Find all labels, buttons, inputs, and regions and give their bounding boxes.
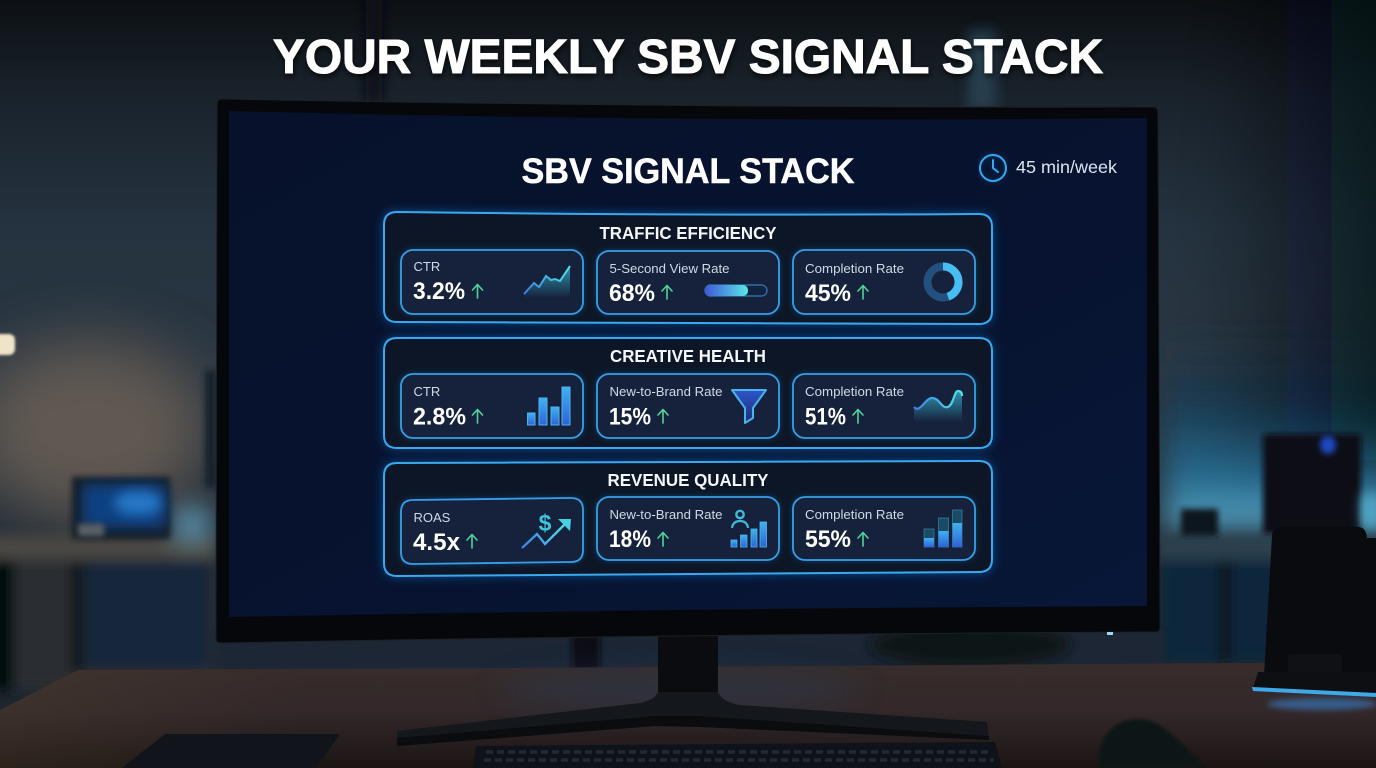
icon: dollar growth arrow <box>522 510 571 548</box>
icon: funnel <box>732 390 766 423</box>
icon: sparkline <box>524 266 570 298</box>
card: completion rate: Completion Rate <box>805 261 904 276</box>
card: CTR: 2.8% <box>413 404 466 430</box>
monitor frame <box>216 99 1160 643</box>
left background desk and legs <box>0 535 216 690</box>
background tower with blue light <box>1263 434 1376 534</box>
panel frame <box>384 338 992 448</box>
panel frame <box>384 212 992 324</box>
card: completion rate: 55% <box>805 526 851 553</box>
background laptop <box>72 477 212 543</box>
panel: traffic efficiency <box>384 212 992 324</box>
icon: clock <box>980 155 1006 181</box>
time badge <box>980 155 1117 181</box>
heading: CREATIVE HEALTH <box>610 346 766 366</box>
card: completion rate: 51% <box>805 404 846 430</box>
right background desk <box>1158 536 1376 665</box>
icon: customer bars <box>731 511 766 547</box>
card: completion rate: Completion Rate <box>805 384 904 399</box>
card: completion rate <box>793 374 975 438</box>
monitor stand <box>397 630 989 746</box>
card: new-to-brand rate: New-to-Brand Rate <box>610 507 722 522</box>
card: new-to-brand rate: 18% <box>609 526 651 553</box>
card: ROAS: 4.5x <box>413 529 461 556</box>
icon: progress bar <box>705 285 767 296</box>
card: completion rate <box>793 250 975 314</box>
time label: 45 min/week <box>1016 157 1117 177</box>
dashboard heading: SBV SIGNAL STACK <box>522 151 855 191</box>
card: ROAS <box>401 498 583 564</box>
icon: wave chart <box>914 391 962 422</box>
small background box <box>1181 509 1218 536</box>
icon: dollar growth arrow: $ <box>539 510 552 536</box>
card: CTR: 3.2% <box>413 278 465 305</box>
icon: bar chart <box>528 387 570 425</box>
wall lamp <box>0 334 15 355</box>
card: new-to-brand rate: New-to-Brand Rate <box>610 384 722 399</box>
icon: stacked bars <box>924 510 962 547</box>
heading: REVENUE QUALITY <box>608 470 769 490</box>
card: CTR: CTR <box>414 259 440 274</box>
card: completion rate <box>793 497 975 560</box>
mouse <box>1099 719 1205 768</box>
panel: creative health <box>384 338 992 448</box>
phone stand <box>1252 527 1376 710</box>
card: 5-second view rate <box>597 251 779 314</box>
card: CTR <box>401 374 583 438</box>
left background shelf <box>205 370 217 488</box>
panel: revenue quality <box>384 461 992 576</box>
card: CTR: CTR <box>414 384 440 399</box>
card: new-to-brand rate: 15% <box>609 404 651 430</box>
keyboard <box>473 742 1002 768</box>
card: 5-second view rate: 68% <box>609 280 655 307</box>
panel frame <box>384 461 992 576</box>
card: completion rate: 45% <box>805 280 851 307</box>
heading: TRAFFIC EFFICIENCY <box>600 223 777 243</box>
card: 5-second view rate: 5-Second View Rate <box>610 261 730 276</box>
monitor screen <box>229 111 1147 617</box>
card: CTR <box>401 250 583 314</box>
main title: YOUR WEEKLY SBV SIGNAL STACK <box>273 31 1103 84</box>
card: completion rate: Completion Rate <box>805 507 904 522</box>
card: ROAS: ROAS <box>414 510 451 525</box>
monitor power light <box>1107 632 1113 635</box>
card: new-to-brand rate <box>597 497 779 560</box>
notebook on desk <box>122 734 340 768</box>
wooden desk surface <box>0 662 1376 768</box>
icon: donut <box>928 266 959 298</box>
card: new-to-brand rate <box>597 374 779 438</box>
